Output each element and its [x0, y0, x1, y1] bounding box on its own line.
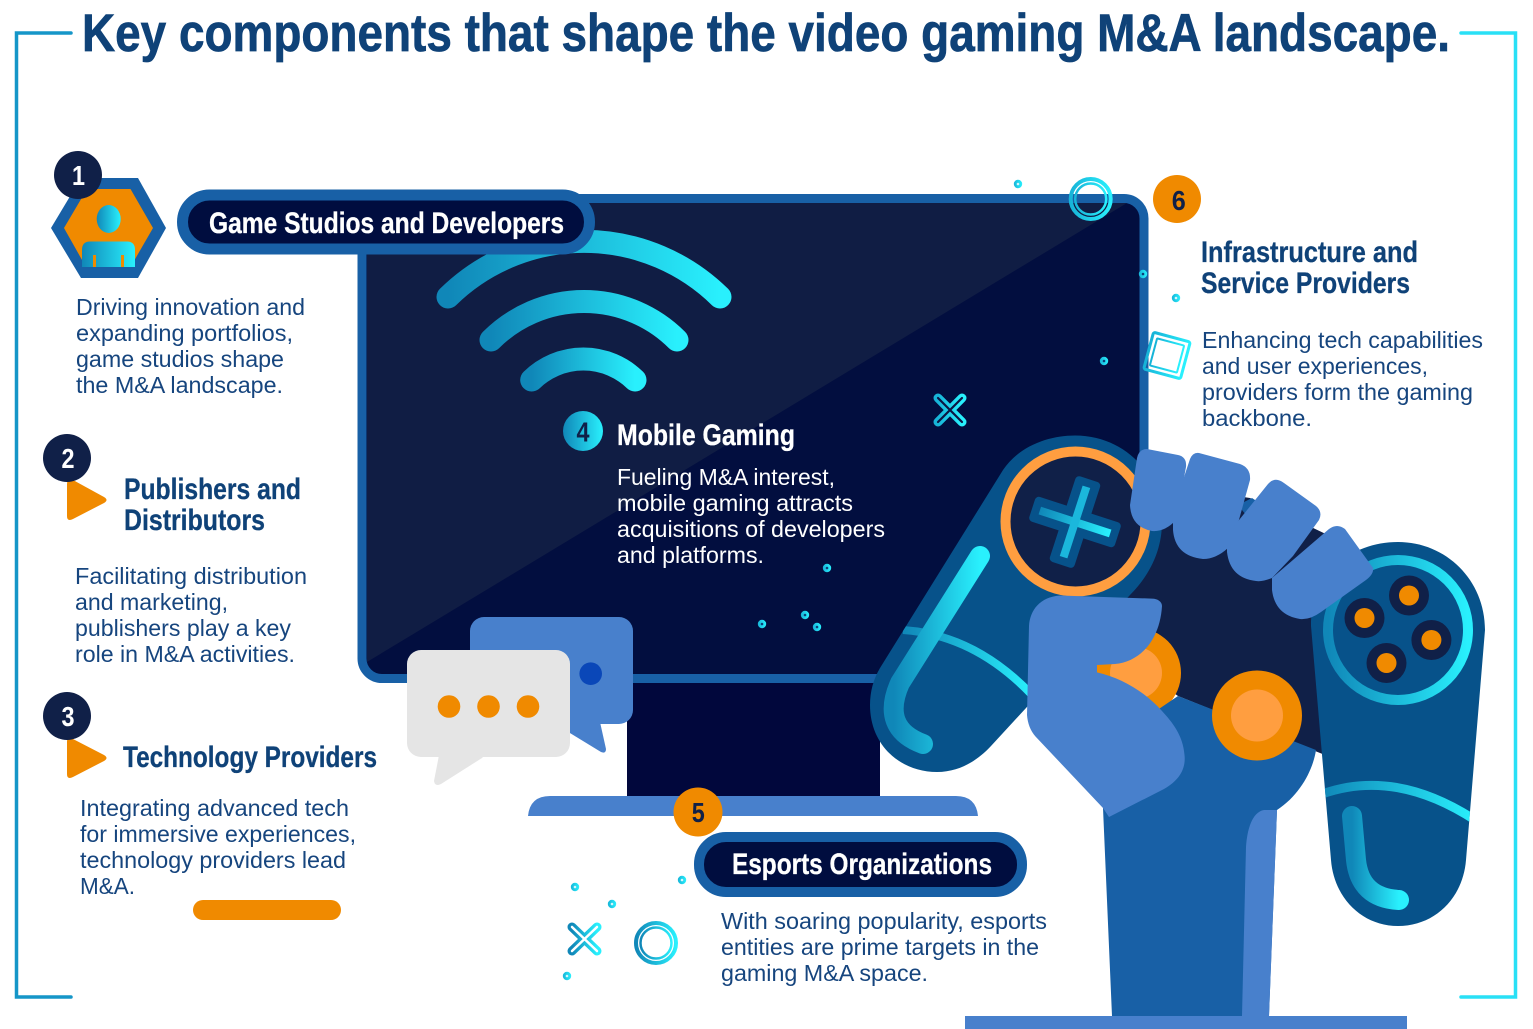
body text: for immersive experiences,: [80, 821, 356, 847]
number 2: [43, 434, 91, 482]
controller orange buttons: [1091, 628, 1181, 718]
body text: and platforms.: [617, 542, 764, 568]
icon: cross on screen: [938, 398, 962, 422]
body text: expanding portfolios,: [76, 320, 293, 346]
number 4: [563, 411, 603, 451]
number 5: 5: [692, 797, 705, 828]
number 1: 1: [72, 160, 85, 191]
decorative dots on screen: [563, 180, 1180, 980]
heading pill: [182, 195, 590, 249]
controller left grip: [870, 436, 1162, 772]
body text: technology providers lead: [80, 847, 346, 873]
table base: [965, 1016, 1407, 1029]
number 3: 3: [62, 701, 74, 732]
body text: [76, 294, 305, 398]
body text: M&A.: [80, 873, 135, 899]
body text: publishers play a key: [75, 615, 291, 641]
body text: Facilitating distribution: [75, 563, 307, 589]
number 6: [1153, 175, 1201, 223]
heading: Publishers and: [124, 473, 301, 506]
controller right grip: [1311, 542, 1485, 926]
body text: [75, 563, 307, 667]
monitor screen: [362, 198, 1144, 678]
body text: Fueling M&A interest,: [617, 464, 835, 490]
body text: the M&A landscape.: [76, 372, 283, 398]
body text: [617, 464, 885, 568]
heading: [124, 473, 301, 537]
d-pad: [1018, 465, 1132, 579]
body text: Driving innovation and: [76, 294, 305, 320]
panel 5: esports organizations: [674, 788, 1047, 986]
body text: With soaring popularity, esports: [721, 908, 1047, 934]
chat bubbles: [407, 617, 633, 785]
body text: [721, 908, 1047, 986]
heading pill: Game Studios and Developers: [209, 207, 564, 240]
body text: mobile gaming attracts: [617, 490, 853, 516]
icon: orange triangle: [67, 480, 106, 520]
hand arm: [1103, 696, 1316, 1016]
body text: role in M&A activities.: [75, 641, 295, 667]
body text: gaming M&A space.: [721, 960, 928, 986]
body text: Enhancing tech capabilities: [1202, 327, 1483, 353]
heading: Distributors: [124, 504, 265, 537]
body text: and user experiences,: [1202, 353, 1428, 379]
heading: Service Providers: [1201, 267, 1410, 300]
icon: circle outline top: [1071, 179, 1111, 219]
monitor stand: [627, 680, 880, 798]
number 2: 2: [62, 443, 74, 474]
number 6: 6: [1172, 185, 1186, 216]
number 4: 4: [576, 416, 590, 448]
heading: Mobile Gaming: [617, 419, 795, 452]
panel 3: technology providers: [43, 692, 377, 920]
body text: providers form the gaming: [1202, 379, 1473, 405]
heading: Infrastructure and: [1201, 236, 1418, 269]
orange bar: [193, 900, 341, 920]
number 3: [43, 692, 91, 740]
icon: square outline: [1144, 332, 1190, 379]
panel 4: mobile gaming: [563, 411, 885, 568]
controller body: [1100, 480, 1370, 755]
icon: orange triangle: [67, 738, 106, 778]
number 1: [54, 151, 102, 199]
icon: circle outline bottom: [636, 923, 676, 963]
body text: game studios shape: [76, 346, 284, 372]
monitor: [362, 198, 1144, 816]
body text: entities are prime targets in the: [721, 934, 1039, 960]
screen diagonal light: [367, 203, 1127, 662]
icon: cross bottom: [572, 927, 597, 951]
body text: Integrating advanced tech: [80, 795, 349, 821]
body text: acquisitions of developers: [617, 516, 885, 542]
panel 1: game studios and developers: [51, 151, 590, 398]
game controller and hand: [870, 436, 1485, 1029]
icon: hexagon person: [51, 178, 166, 278]
hand fingers: [1130, 449, 1373, 619]
grey chat bubble: [407, 650, 570, 785]
panel 6: infrastructure and service providers: [1153, 175, 1483, 431]
monitor base: [528, 796, 978, 816]
heading: Technology Providers: [123, 741, 377, 774]
body text: and marketing,: [75, 589, 228, 615]
hand fist and thumb: [1027, 596, 1185, 817]
body text: [80, 795, 356, 899]
blue chat bubble: [470, 617, 633, 753]
heading: [1201, 236, 1418, 300]
icon: wifi signal: [448, 241, 720, 380]
heading pill: [699, 837, 1022, 892]
number 5: [674, 788, 722, 836]
body text: backbone.: [1202, 405, 1312, 431]
arm highlight: [1242, 810, 1277, 1016]
body text: [1202, 327, 1483, 431]
start button: [1212, 670, 1302, 760]
panel 2: publishers and distributors: [43, 434, 307, 667]
heading pill: Esports Organizations: [732, 848, 992, 881]
